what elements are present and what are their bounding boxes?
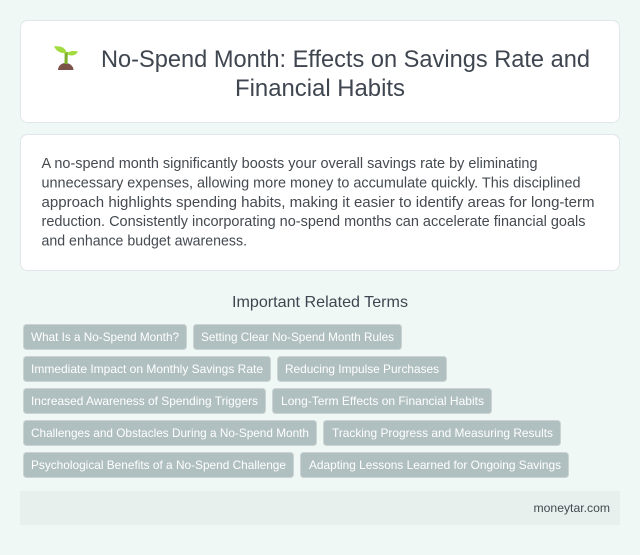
tag 10 xyxy=(300,452,568,478)
title text: Financial Habits xyxy=(235,75,405,102)
title card xyxy=(20,20,620,122)
title text xyxy=(101,46,590,102)
title text: No-Spend Month: Effects on Savings Rate and xyxy=(101,46,590,73)
tag 3 xyxy=(24,356,270,382)
tag 1: What Is a No-Spend Month? xyxy=(31,330,179,344)
description text: A no-spend month significantly boosts your overall savings rate by eliminating xyxy=(42,156,538,172)
tag 7: Challenges and Obstacles During a No-Spend Month xyxy=(31,426,309,440)
tag 2 xyxy=(194,324,402,350)
tag 9 xyxy=(24,452,294,478)
tag 6 xyxy=(272,388,492,414)
heading: related terms: Important Related Terms xyxy=(232,294,408,311)
icon: sprout xyxy=(54,46,78,70)
tag 9: Psychological Benefits of a No-Spend Challenge xyxy=(31,458,286,472)
tag 8: Tracking Progress and Measuring Results xyxy=(332,426,553,440)
tag 1 xyxy=(24,324,186,350)
footer xyxy=(20,491,620,525)
tag 5: Increased Awareness of Spending Triggers xyxy=(31,394,258,408)
tag list xyxy=(24,324,568,478)
tag 7 xyxy=(24,420,316,446)
tag 4 xyxy=(278,356,446,382)
tag 6: Long-Term Effects on Financial Habits xyxy=(281,394,484,408)
tag 4: Reducing Impulse Purchases xyxy=(285,362,439,376)
tag 3: Immediate Impact on Monthly Savings Rate xyxy=(31,362,263,376)
description text: approach highlights spending habits, making it easier to identify areas for long-term xyxy=(42,195,595,211)
description text xyxy=(42,156,595,250)
tag 5 xyxy=(24,388,266,414)
tag 8 xyxy=(324,420,560,446)
footer source: moneytar.com xyxy=(534,501,610,515)
tag 10: Adapting Lessons Learned for Ongoing Savings xyxy=(309,458,561,472)
description text: and enhance budget awareness. xyxy=(42,234,247,250)
description text: unnecessary expenses, allowing more money to accumulate quickly. This disciplined xyxy=(42,176,580,192)
description text: reduction. Consistently incorporating no-spend months can accelerate financial goals xyxy=(42,214,586,230)
panel: description xyxy=(20,134,620,270)
tag 2: Setting Clear No-Spend Month Rules xyxy=(201,330,394,344)
